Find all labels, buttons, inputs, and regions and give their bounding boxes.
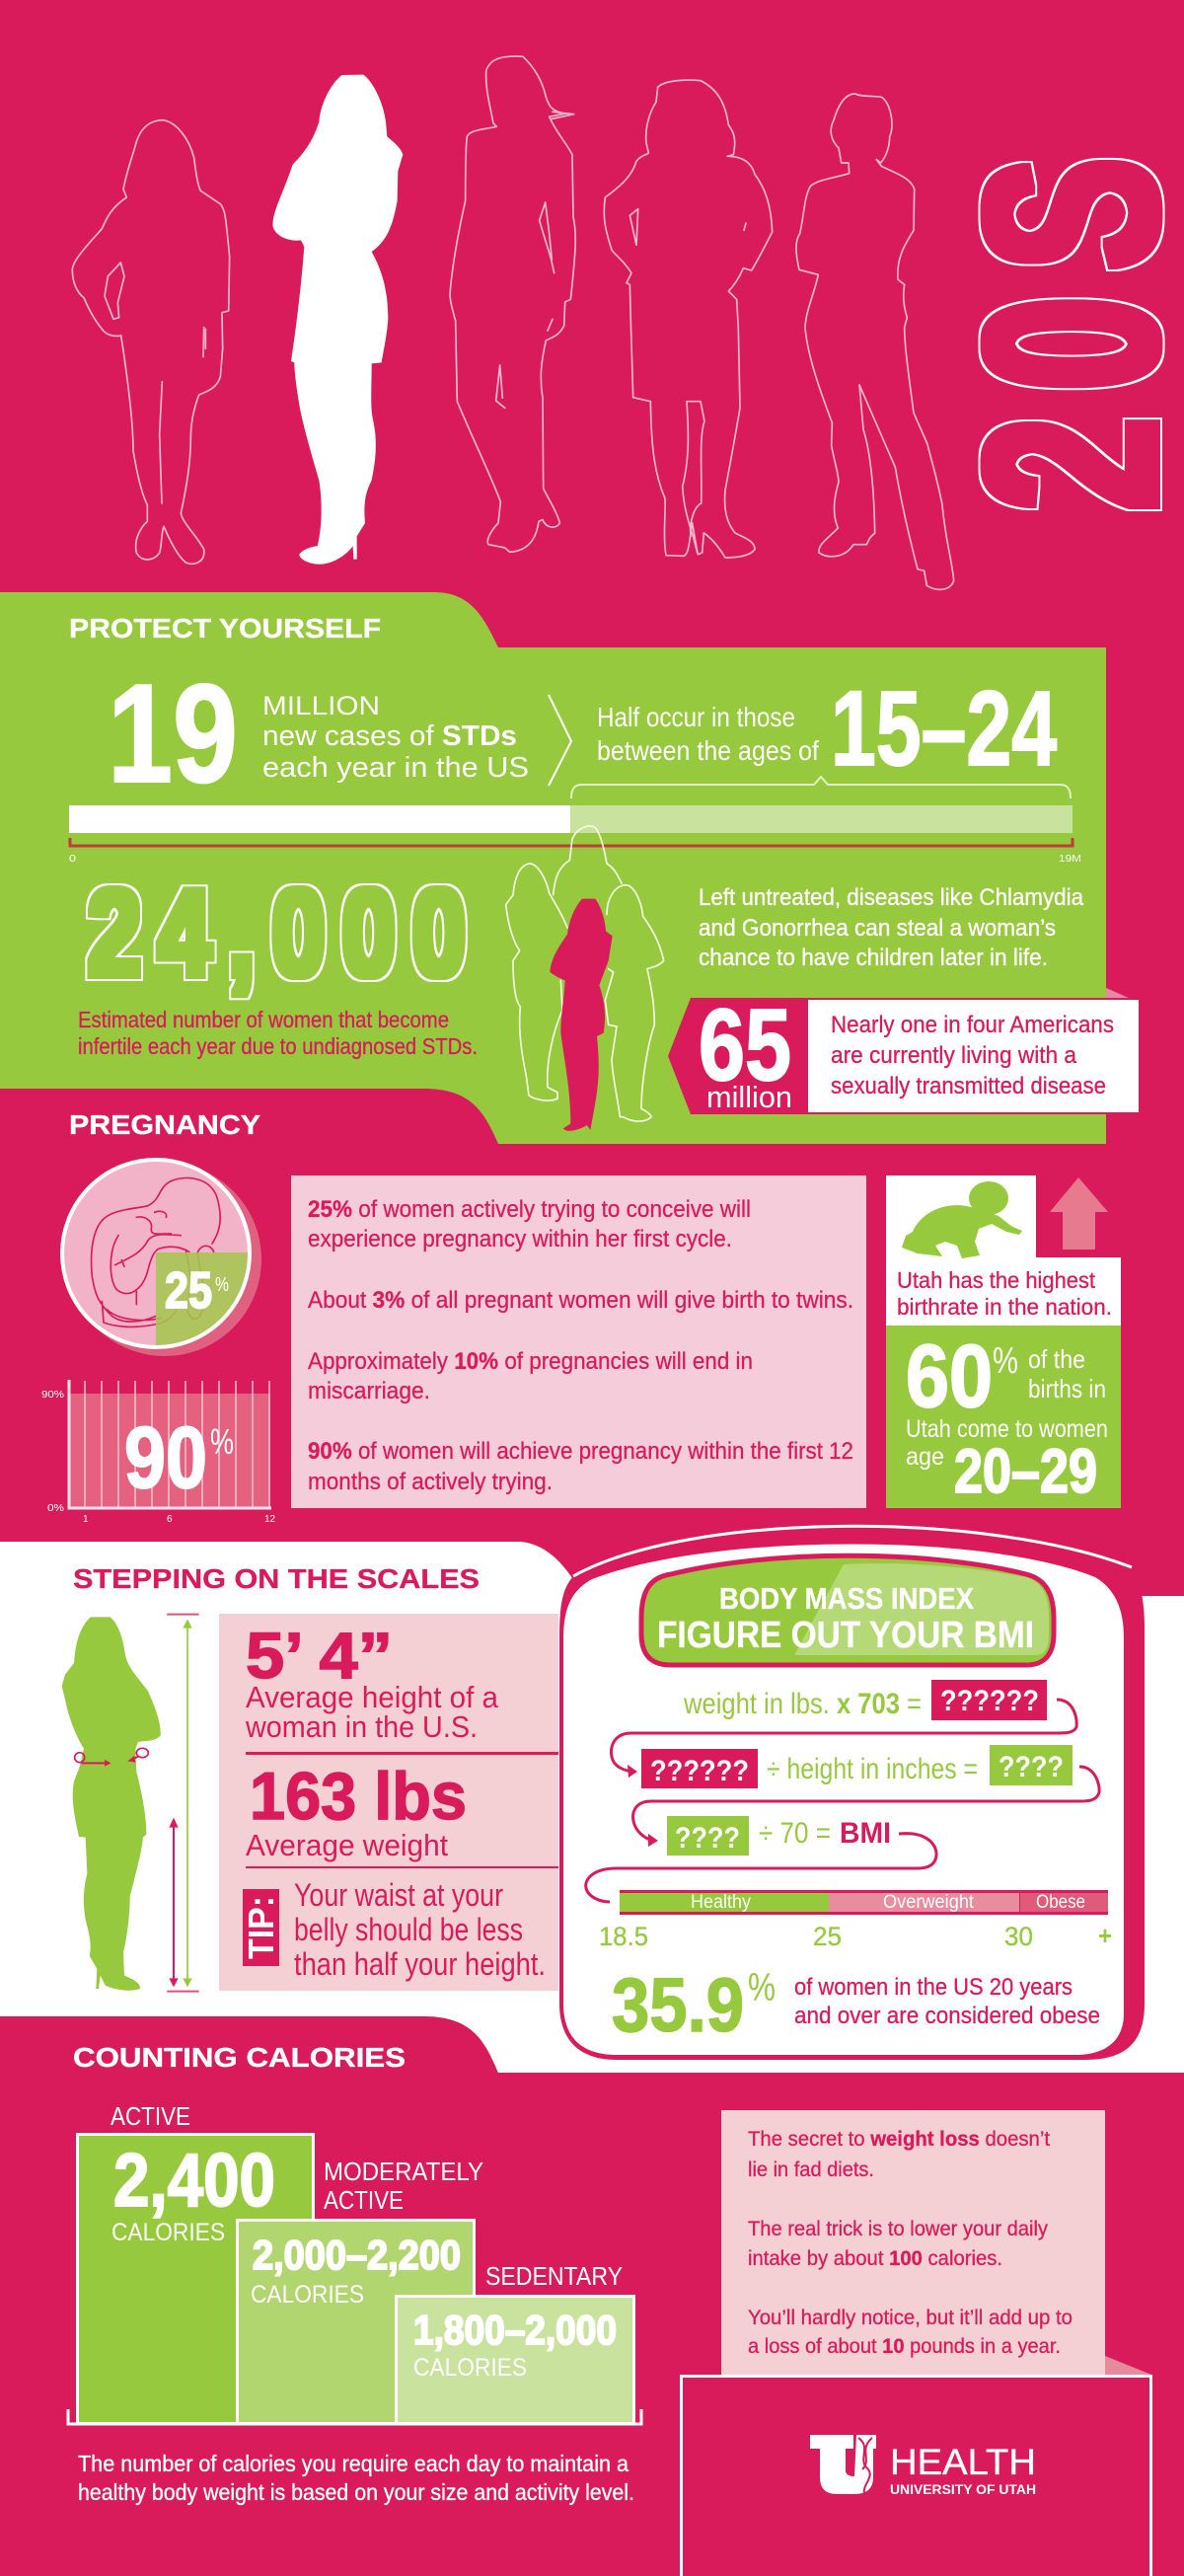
green section background	[0, 592, 1106, 1144]
stats panel: height and weight: Average height of a	[246, 1680, 499, 1714]
panel: utah birthrate: birthrate in the nation.	[897, 1294, 1112, 1320]
heading: protect yourself: PROTECT YOURSELF	[69, 613, 381, 644]
chart: 90% area chart: %	[210, 1421, 234, 1462]
BMI frame	[559, 1527, 1145, 2060]
text panel: pregnancy facts: miscarriage.	[308, 1378, 430, 1404]
chart: BMI scale bar: Obese	[1036, 1892, 1085, 1913]
stat: half occur 15-24: Half occur in those	[597, 702, 795, 732]
chart: 90% area chart: 6	[167, 1514, 173, 1525]
caption: infertility: Estimated number of women that become	[78, 1007, 449, 1032]
panel: utah birthrate: 20–29	[954, 1437, 1097, 1506]
panel: BMI calculator	[559, 1526, 1145, 2060]
bar: moderately active: MODERATELY	[324, 2157, 483, 2186]
formula step 3	[667, 1816, 891, 1856]
bar: active	[77, 2101, 314, 2424]
stat: 19 million	[108, 655, 529, 812]
formula step 3: ????	[675, 1822, 740, 1855]
brace over half bar	[571, 777, 1071, 798]
text panel: pregnancy facts: months of actively trying.	[308, 1469, 553, 1495]
text panel: weight loss	[721, 2110, 1151, 2375]
badge: body mass index	[641, 1555, 1054, 1665]
bar: active: ACTIVE	[111, 2101, 190, 2131]
formula step 1: weight in lbs. x 703 =	[683, 1688, 922, 1720]
caption: infertility: infertile each year due to undiagnosed STDs.	[78, 1033, 478, 1059]
text panel: pregnancy facts	[291, 1175, 866, 1508]
stats panel: height and weight: Average weight	[246, 1828, 448, 1862]
stat: 19 million: MILLION	[262, 691, 380, 720]
bar chart: 19 million split: 19M	[1059, 854, 1081, 865]
callout: 65 million: are currently living with a	[831, 1042, 1077, 1069]
bar: active: 2,400	[113, 2139, 275, 2223]
callout: 65 million: Nearly one in four Americans	[831, 1012, 1114, 1038]
panel: utah birthrate: births in	[1028, 1374, 1106, 1403]
bar: moderately active: CALORIES	[251, 2281, 364, 2309]
stat: 35.9% obese	[612, 1963, 1100, 2048]
chart: BMI scale bar: 25	[813, 1922, 842, 1951]
callout: tip: than half your height.	[294, 1946, 546, 1982]
callout: 65 million: sexually transmitted disease	[831, 1073, 1106, 1099]
chart: 90% area chart: 1	[83, 1514, 89, 1525]
callout: 65 million: 65	[699, 988, 791, 1101]
text panel: weight loss: You’ll hardly notice, but it’ll add up to	[748, 2307, 1073, 2329]
logo: university of utah health: HEALTH	[890, 2442, 1036, 2482]
text panel: pregnancy facts: Approximately 10% of pregnancies will end in	[308, 1348, 753, 1375]
bar: moderately active	[237, 2157, 483, 2424]
stats panel: height and weight: woman in the U.S.	[245, 1709, 478, 1744]
outlined woman 1	[72, 120, 230, 564]
caption: calories	[78, 2451, 634, 2505]
bar: sedentary: 1,800–2,000	[413, 2307, 617, 2353]
panel: protect yourself	[0, 592, 1139, 1144]
badge: body mass index: BODY MASS INDEX	[719, 1581, 974, 1616]
callout: tip: belly should be less	[294, 1912, 523, 1947]
formula step 2: ÷ height in inches =	[767, 1753, 978, 1785]
chart: BMI scale bar	[599, 1890, 1112, 1951]
text panel: weight loss: intake by about 100 calories.	[748, 2247, 1002, 2270]
callout: tip	[241, 1877, 546, 1982]
chart: BMI scale bar: +	[1098, 1921, 1112, 1950]
icon: woman measuring height	[62, 1615, 199, 1992]
bar: active: CALORIES	[111, 2219, 225, 2246]
arrow: up	[1050, 1177, 1108, 1250]
callout: 65 million: million	[706, 1080, 792, 1114]
chart: 90% area chart: 0%	[47, 1503, 64, 1514]
callout: 65 million	[668, 988, 1139, 1114]
stat: 35.9% obese: 35.9	[612, 1963, 744, 2048]
bar chart: 19 million split: 0	[69, 854, 77, 865]
logo: university of utah health	[810, 2435, 1036, 2497]
arrow: connector 2	[633, 1767, 1099, 1847]
text panel: pregnancy facts: 90% of women will achieve pregnancy within the first 12	[308, 1438, 853, 1465]
chart: BMI scale bar: 18.5	[599, 1922, 648, 1951]
text: left untreated: and Gonorrhea can steal a woman’s	[699, 915, 1056, 942]
text panel: weight loss: The real trick is to lower your daily	[748, 2218, 1048, 2240]
caption: calories: healthy body weight is based on your size and activity level.	[78, 2479, 634, 2505]
solid white woman	[273, 75, 403, 565]
formula step 3: ÷ 70 =	[759, 1817, 831, 1850]
pocket panel with logo	[681, 2377, 1150, 2576]
bar: sedentary: CALORIES	[413, 2354, 527, 2382]
panel: utah birthrate: Utah come to women	[906, 1415, 1108, 1443]
panel: stepping on the scales	[0, 1526, 1184, 2073]
formula step 3: BMI	[840, 1817, 891, 1850]
hero: five women silhouettes	[72, 56, 954, 589]
stat: half occur 15-24: between the ages of	[597, 735, 819, 766]
heading: counting calories: COUNTING CALORIES	[73, 2042, 406, 2073]
panel: utah birthrate: age	[906, 1443, 944, 1471]
bar chart: 19 million split	[69, 805, 1081, 865]
text: left untreated: chance to have children later in life.	[699, 945, 1048, 971]
chart: 25% fetus circle: 25	[165, 1262, 212, 1320]
outlined woman 3	[450, 56, 575, 552]
stat: 19 million: 19	[108, 655, 238, 812]
heading: pregnancy: PREGNANCY	[69, 1109, 260, 1140]
stat: half occur 15-24	[597, 668, 1057, 788]
outlined woman 4	[604, 80, 773, 558]
text: left untreated	[699, 884, 1084, 971]
stat: 35.9% obese: of women in the US 20 years	[794, 1974, 1073, 2001]
chart: BMI scale bar: Overweight	[883, 1892, 975, 1913]
chart: 90% area chart: 12	[264, 1514, 276, 1525]
bar: sedentary: SEDENTARY	[485, 2261, 623, 2291]
stat: 24,000: 24,000	[88, 866, 482, 1002]
formula step 2	[641, 1745, 1073, 1788]
panel: pregnancy	[41, 1109, 1121, 1525]
panel: utah birthrate: %	[993, 1340, 1018, 1382]
stat: 35.9% obese: and over are considered obese	[794, 2003, 1100, 2029]
icon: crawling baby	[902, 1181, 1022, 1258]
chart: 25% fetus circle	[62, 1160, 261, 1356]
badge: body mass index: FIGURE OUT YOUR BMI	[657, 1615, 1034, 1656]
text panel: weight loss: a loss of about 10 pounds in a year.	[748, 2335, 1061, 2358]
heading: stepping on the scales: STEPPING ON THE SCALES	[73, 1563, 480, 1594]
text panel: pregnancy facts: experience pregnancy within her first cycle.	[308, 1226, 732, 1252]
icon: fetus outline	[92, 1178, 220, 1326]
chart: 90% area chart: 90%	[41, 1390, 64, 1401]
text: left untreated: Left untreated, diseases like Chlamydia	[699, 884, 1084, 911]
callout: tip: TIP:	[241, 1896, 281, 1959]
callout: tip: Your waist at your	[294, 1877, 503, 1913]
stat: 35.9% obese: %	[748, 1966, 776, 2009]
panel: counting calories	[68, 2042, 1151, 2576]
stats panel: height and weight: 163 lbs	[250, 1759, 467, 1834]
bar: sedentary	[397, 2261, 633, 2424]
outlined woman 5	[796, 94, 954, 589]
stat: 19 million: each year in the US	[262, 752, 529, 784]
stats panel: height and weight: 5’ 4”	[246, 1619, 393, 1692]
formula step 2: ????	[999, 1751, 1064, 1783]
chart: calories stepped bars	[68, 2101, 641, 2424]
formula step 1: ??????	[940, 1685, 1039, 1717]
panel: utah birthrate: 60	[906, 1327, 993, 1426]
logo: university of utah health: UNIVERSITY OF UTAH	[890, 2481, 1036, 2497]
caption: calories: The number of calories you require each day to maintain a	[78, 2451, 629, 2476]
caption: infertility	[78, 1007, 478, 1059]
bar: moderately active: 2,000–2,200	[253, 2232, 461, 2278]
panel: utah birthrate: Utah has the highest	[897, 1267, 1096, 1293]
stats panel: height and weight	[219, 1614, 558, 1991]
arrow: chevron	[549, 695, 571, 786]
text panel: weight loss: The secret to weight loss doesn’t	[748, 2128, 1050, 2151]
white section background	[0, 1542, 1184, 2073]
formula step 2: ??????	[650, 1755, 749, 1787]
icon: group of women silhouettes	[506, 826, 664, 1131]
chart: BMI scale bar: Healthy	[691, 1892, 751, 1913]
bar: moderately active: ACTIVE	[324, 2185, 404, 2215]
text panel: pregnancy facts: About 3% of all pregnant women will give birth to twins.	[308, 1287, 853, 1314]
stat: half occur 15-24: 15–24	[831, 668, 1057, 788]
text panel: weight loss: lie in fad diets.	[748, 2159, 874, 2181]
stat: 19 million: new cases of STDs	[262, 720, 517, 752]
text panel: pregnancy facts: 25% of women actively trying to conceive will	[308, 1196, 751, 1223]
chart: 90% area chart: 90	[124, 1408, 207, 1506]
chart: BMI scale bar: 30	[1004, 1922, 1033, 1951]
chart: 25% fetus circle: %	[215, 1274, 229, 1296]
panel: utah birthrate	[886, 1175, 1121, 1508]
panel: utah birthrate: of the	[1028, 1344, 1085, 1374]
arrow: connector 1	[612, 1700, 1076, 1778]
chart: 90% area chart	[41, 1380, 276, 1525]
arrow: connector 3	[586, 1834, 936, 1902]
formula step 1	[683, 1680, 1047, 1720]
